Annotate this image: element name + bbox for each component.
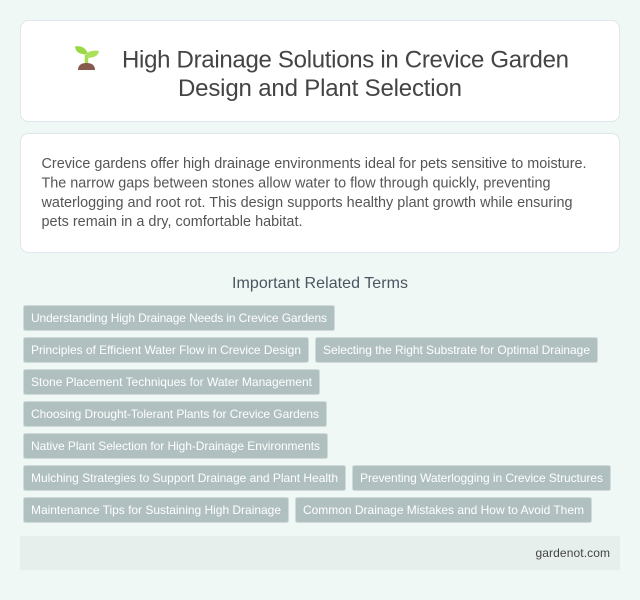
tag <box>24 498 288 522</box>
tag <box>24 434 328 458</box>
description text <box>40 156 586 230</box>
tag: Preventing Waterlogging in Crevice Structures <box>360 471 603 485</box>
tag <box>24 338 308 362</box>
description text: Crevice gardens offer high drainage environments ideal for pets sensitive to moisture. <box>42 156 586 172</box>
title: High Drainage Solutions in Crevice Garden <box>122 46 569 74</box>
tag: Mulching Strategies to Support Drainage and Plant Health <box>31 471 338 485</box>
tag: Common Drainage Mistakes and How to Avoid Them <box>303 503 584 517</box>
tag: Stone Placement Techniques for Water Management <box>31 375 313 389</box>
tag: Maintenance Tips for Sustaining High Drainage <box>31 503 281 517</box>
tag <box>24 466 346 490</box>
tag <box>24 306 334 330</box>
description text: The narrow gaps between stones allow water to flow through quickly, preventing <box>42 176 550 192</box>
footer <box>20 536 620 570</box>
tag <box>316 338 598 362</box>
tag: Understanding High Drainage Needs in Crevice Gardens <box>31 311 327 325</box>
title <box>122 46 569 102</box>
tag: Native Plant Selection for High-Drainage Environments <box>31 439 320 453</box>
tag: Principles of Efficient Water Flow in Crevice Design <box>31 343 301 357</box>
tag list <box>24 306 610 522</box>
panel: description card <box>20 134 620 252</box>
tag <box>24 370 320 394</box>
tag <box>296 498 592 522</box>
icon: seedling <box>75 46 99 70</box>
title: Design and Plant Selection <box>178 75 462 102</box>
footer source: gardenot.com <box>536 546 610 560</box>
tag <box>352 466 610 490</box>
description text: pets remain in a dry, comfortable habitat. <box>42 214 302 230</box>
description text: waterlogging and root rot. This design supports healthy plant growth while ensuring <box>40 195 572 211</box>
tag <box>24 402 326 426</box>
tag: Selecting the Right Substrate for Optimal Drainage <box>323 343 590 357</box>
tag: Choosing Drought-Tolerant Plants for Crevice Gardens <box>31 407 319 421</box>
panel: title card <box>20 20 620 122</box>
heading: related terms: Important Related Terms <box>232 275 408 292</box>
